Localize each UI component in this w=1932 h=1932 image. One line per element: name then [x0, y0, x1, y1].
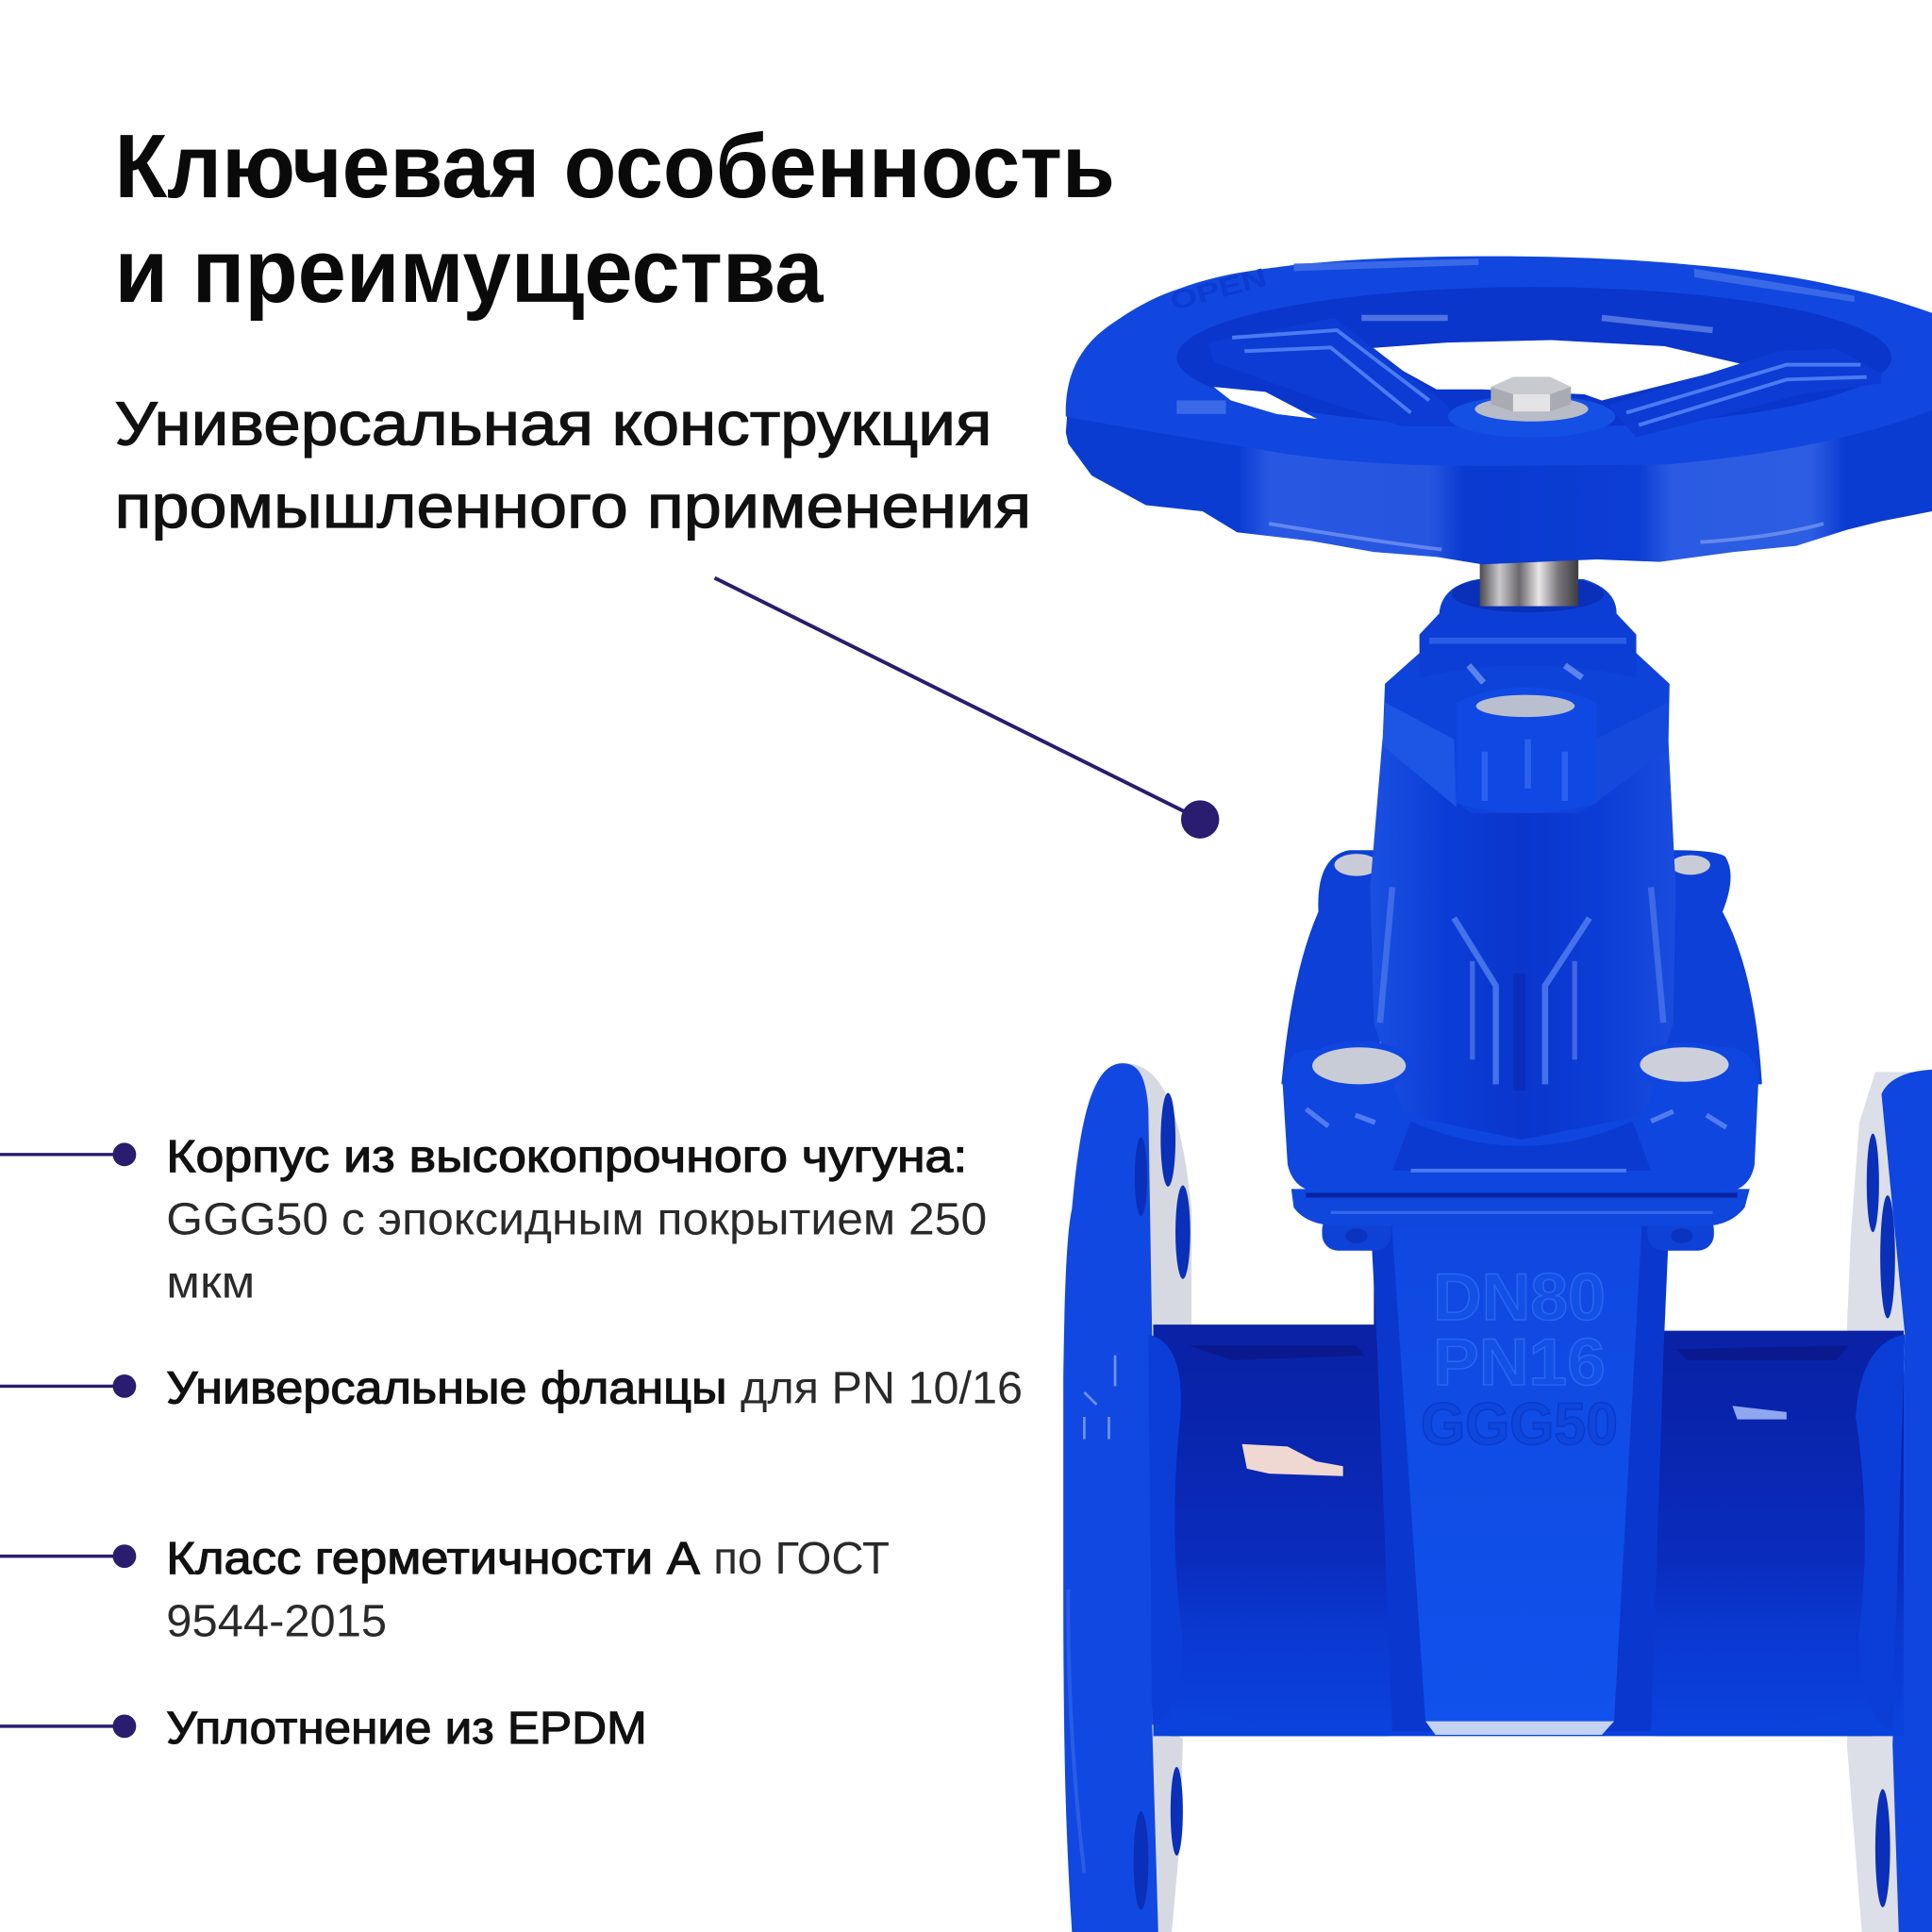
subtitle — [114, 390, 1031, 541]
upper bonnet plate with lugs — [1281, 850, 1762, 1192]
rim markings: OPEN — [1167, 262, 1270, 316]
title: Ключевая особенность — [114, 117, 1115, 217]
subtitle: промышленного применения — [114, 472, 1031, 541]
marker — [0, 1374, 136, 1398]
washer — [1474, 397, 1589, 422]
feature 2: flanges: Универсальные фланцы — [166, 1363, 727, 1414]
feature 2: flanges: для PN 10/16 — [741, 1363, 1023, 1414]
bonnet and neck — [1370, 575, 1675, 1140]
feature 3: tightness class — [0, 1533, 890, 1647]
feature 3: tightness class: по ГОСТ — [713, 1533, 890, 1584]
title — [114, 117, 1115, 322]
spokes — [1208, 318, 1454, 426]
feature 4: seal: Уплотнение из EPDM — [166, 1703, 647, 1754]
title: и преимущества — [114, 222, 824, 322]
central gate body with embossed marking: PN16 — [1433, 1324, 1606, 1399]
flange bolt caps — [1305, 1041, 1736, 1127]
product photo: gate valve — [1063, 257, 1932, 1932]
central gate body with embossed marking — [1370, 1214, 1670, 1735]
handwheel — [1066, 257, 1932, 564]
bolt — [1491, 377, 1571, 411]
hub — [1448, 395, 1615, 438]
feature 1: body material — [0, 1131, 987, 1307]
central gate body with embossed marking: GGG50 — [1421, 1391, 1618, 1457]
glare on pipe — [1242, 1444, 1343, 1476]
right flange — [1847, 1070, 1932, 1932]
callout leader to valve — [715, 578, 1219, 839]
left flange — [1063, 1063, 1191, 1932]
marker — [0, 1544, 136, 1568]
feature 2: flanges — [0, 1363, 1023, 1414]
horizontal pipe body — [1148, 1232, 1905, 1736]
feature 1: body material: GGG50 с эпоксидным покрытием 250 — [166, 1194, 987, 1245]
marker — [0, 1142, 136, 1166]
spoke opening — [1176, 287, 1891, 427]
valve stem — [1480, 555, 1578, 607]
subtitle: Универсальная конструкция — [114, 390, 991, 458]
central gate body with embossed marking: DN80 — [1433, 1259, 1606, 1334]
marker — [0, 1714, 136, 1738]
lower bonnet flange — [1291, 1189, 1750, 1251]
feature 1: body material: Корпус из высокопрочного чугуна: — [166, 1131, 967, 1182]
feature 3: tightness class: Класс герметичности А — [166, 1533, 701, 1584]
feature 1: body material: мкм — [166, 1257, 255, 1307]
feature 3: tightness class: 9544-2015 — [166, 1596, 387, 1647]
rim top surface — [1066, 257, 1932, 466]
rim side band — [1066, 394, 1932, 564]
